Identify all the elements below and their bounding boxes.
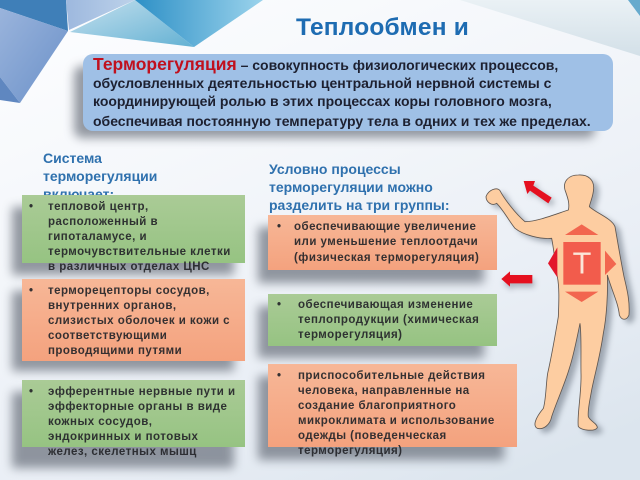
- list item text: приспособительные действия: [298, 370, 485, 382]
- panel: efferent pathways: [6, 380, 245, 474]
- list item text: [277, 370, 495, 457]
- list item text: [29, 285, 230, 357]
- list item text: [29, 201, 231, 273]
- list item text: •: [29, 201, 34, 213]
- arrow: heat left: [501, 271, 534, 291]
- list item text: •: [277, 221, 282, 233]
- list item text: [277, 221, 479, 264]
- list item text: •: [29, 285, 34, 297]
- list item text: •: [277, 299, 282, 311]
- panel: thermoreceptors: [6, 279, 245, 378]
- definition text: обеспечивая постоянную температуру тела в одних и тех же пределах.: [93, 113, 591, 129]
- list item text: •: [29, 386, 34, 398]
- definition text: Терморегуляция – совокупность физиологических процессов,: [93, 54, 558, 74]
- list item text: [29, 386, 236, 458]
- list item text: кожных сосудов,: [48, 416, 152, 428]
- heading: left column: Система: [43, 150, 102, 166]
- heading: right column: терморегуляции можно: [269, 179, 433, 195]
- arrow: heat up-left: [524, 181, 555, 207]
- list item text: •: [277, 370, 282, 382]
- list item text: терморегуляция): [298, 329, 402, 341]
- list item text: проводящими путями: [48, 345, 182, 357]
- list item text: человека, направленные на: [298, 385, 470, 397]
- definition text: координирующей ролью в этих процессах коры головного мозга,: [93, 93, 552, 109]
- heading: left column: [43, 150, 157, 195]
- list item text: тепловой центр,: [48, 201, 149, 213]
- panel: definition: [67, 54, 613, 144]
- icon: body silhouette: [486, 175, 635, 434]
- list item text: или уменьшение теплоотдачи: [294, 236, 478, 248]
- icon: T square with heat arrows: T: [573, 246, 592, 280]
- list item text: термочувствительные клетки: [48, 246, 231, 258]
- definition text: [93, 54, 591, 129]
- list item text: создание благоприятного: [298, 400, 456, 412]
- list item text: обеспечивающая изменение: [298, 299, 473, 311]
- icon: T square with heat arrows: [548, 224, 616, 302]
- list item text: расположенный в: [48, 216, 158, 228]
- heading: right column: разделить на три группы:: [269, 197, 450, 213]
- list item text: слизистых оболочек и кожи с: [48, 315, 230, 327]
- list item text: одежды (поведенческая: [298, 430, 447, 442]
- list item text: эфферентные нервные пути и: [48, 386, 236, 398]
- list item text: терморегуляция): [298, 445, 402, 457]
- panel: chemical thermoregulation: [252, 294, 497, 364]
- title: Теплообмен и микроклимат: [296, 14, 469, 73]
- list item text: теплопродукции (химическая: [298, 314, 479, 326]
- list item text: в различных отделах ЦНС: [48, 261, 210, 273]
- list item text: гипоталамусе, и: [48, 231, 147, 243]
- human figure illustration: [486, 174, 638, 438]
- panel: behavioural thermoregulation: [252, 364, 517, 466]
- list item text: эндокринных и потовых: [48, 431, 198, 443]
- list item text: [277, 299, 479, 341]
- list item text: (физическая терморегуляция): [294, 252, 479, 264]
- panel: physical thermoregulation: [252, 215, 497, 290]
- list item text: соответствующими: [48, 330, 167, 342]
- definition text: обусловленных деятельностью центральной нервной системы с: [93, 75, 551, 91]
- list item text: терморецепторы сосудов,: [48, 285, 210, 297]
- list item text: эффекторные органы в виде: [48, 401, 227, 413]
- list item text: желез, скелетных мышц: [48, 446, 197, 458]
- heading: right column: Условно процессы: [269, 161, 401, 177]
- list item text: микроклимата и использование: [298, 415, 495, 427]
- panel: thermal centre: [6, 195, 245, 282]
- heading: right column: [269, 161, 450, 213]
- heading: left column: терморегуляции: [43, 168, 157, 184]
- list item text: внутренних органов,: [48, 300, 177, 312]
- list item text: обеспечивающие увеличение: [294, 221, 476, 233]
